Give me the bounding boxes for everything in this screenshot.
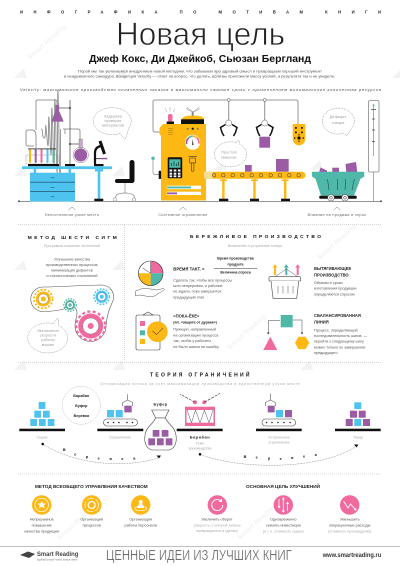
- label: turnover: (скорость, с которой запасы: [194, 523, 241, 527]
- icon: turnover: [208, 495, 227, 515]
- panel: lean production: [136, 234, 367, 355]
- label: reduce expenses: Уменьшить: [340, 518, 360, 522]
- flask: round: [73, 139, 88, 163]
- label: turnover: Увеличить оборот: [201, 518, 233, 522]
- signal lamp: [165, 107, 175, 124]
- heading: total quality management: МЕТОД ВСЕОБЩЕГО УПРАВЛЕНИЯ КАЧЕСТВОМ: [35, 484, 148, 489]
- takt time text: [173, 278, 232, 299]
- label: reduce expenses: (стоимость производства): [328, 529, 371, 533]
- heading: main goal: ОСНОВНАЯ ЦЕЛЬ УЛУЧШЕНИЙ: [246, 484, 320, 489]
- intro text: Порой мы так увлекаемся внедрением новой методики, что забываем про здравый смысл и превращаем хороший инструмент: [78, 70, 322, 74]
- text: Smart Reading: [237, 503, 278, 541]
- poka-yoke text: Принцип, направленный: [173, 328, 216, 332]
- bubble: shortage: товара: [332, 121, 345, 125]
- stage: buffer: Буфер: [154, 403, 168, 407]
- panel: main improvement goal: [194, 484, 371, 533]
- label: staff organization: Организация: [129, 518, 152, 522]
- legend circle: Веревка: [73, 414, 90, 418]
- legend circle: Буфер: [75, 404, 88, 408]
- six sigma description: и статистических отклонений: [47, 274, 97, 278]
- chair: [113, 160, 136, 201]
- pull production text: изготовления продукции: [314, 287, 356, 291]
- stage: product: [335, 402, 381, 440]
- six sigma description: [46, 258, 98, 278]
- overhead pipe: [153, 100, 298, 132]
- label: variable bottleneck: Непостоянное узкое место: [45, 213, 99, 217]
- six sigma description: Улучшение качества: [54, 258, 91, 262]
- stage: removed constraint: ограничение: [268, 441, 290, 445]
- pull production text: Объемы и сроки: [314, 281, 343, 285]
- balanced line text: перейти к следующему шагу: [314, 340, 364, 344]
- bubble: machine speed: скорости: [40, 334, 56, 338]
- stage: product: Товар: [353, 436, 363, 440]
- bubble: machine idle: [215, 140, 247, 167]
- takt time formula: продукта: [228, 262, 244, 266]
- subheading: lean: Выявление и устранение потерь: [228, 244, 282, 248]
- cart: [312, 172, 364, 201]
- gears with belt: [31, 285, 114, 342]
- bubble: machine speed: Увеличение: [37, 329, 59, 333]
- poka-yoke text: «ПОКА-ЁКЕ»: [173, 313, 200, 318]
- icon: continuous improvement: [32, 495, 51, 515]
- balanced line text: предыдущего: [314, 351, 338, 355]
- vent: [168, 128, 173, 135]
- arrow: rope 1: е: [74, 452, 76, 456]
- stage: removed constraint: Устраненное: [268, 436, 290, 440]
- stage: raw materials: [19, 402, 65, 440]
- arrow: rope 2: р: [268, 456, 271, 460]
- bubble: machine speed: машин: [42, 343, 54, 347]
- label: reduce investment: снизить инвестиции: [266, 523, 301, 527]
- pull production text: [314, 266, 356, 296]
- title: Новая цель: [116, 16, 285, 52]
- takt time text: предыдущий этап: [173, 295, 204, 299]
- text: Smart Reading: [227, 313, 268, 351]
- arrow: rope 1: е: [98, 456, 100, 460]
- footer slogan: ЦЕННЫЕ ИДЕИ ИЗ ЛУЧШИХ КНИГ: [106, 548, 292, 564]
- stage: drum: Темп: [196, 442, 204, 446]
- poka-yoke text: [173, 313, 219, 349]
- arrow: rope 1: р: [86, 455, 89, 459]
- gauge: [185, 135, 200, 150]
- authors: Джеф Кокс, Ди Джейкоб, Сьюзан Бергланд: [89, 53, 311, 65]
- panel: theory of constraints: [19, 371, 381, 465]
- text: Smart Reading: [127, 23, 168, 61]
- footer url: www.smartreading.ru: [322, 553, 382, 559]
- takt time formula: Время производства: [217, 257, 254, 261]
- heading: theory of constraints: ТЕОРИЯ ОГРАНИЧЕНИЙ: [150, 371, 250, 379]
- label: turnover: превращаются в сделки): [196, 529, 238, 533]
- bubble: machine idle: машины: [221, 156, 237, 160]
- arrow: rope 2: е: [256, 456, 258, 460]
- footer: [20, 548, 382, 564]
- label: process organization: процессов: [83, 523, 101, 527]
- icon: hand: [136, 288, 164, 297]
- label: turnover: [194, 518, 241, 533]
- floor line: [18, 200, 382, 202]
- bubble: delay: материалов: [102, 124, 124, 128]
- balanced line text: [314, 313, 367, 355]
- six sigma description: минимизация дефектов: [51, 268, 93, 272]
- arrow: rope 2: е: [280, 457, 282, 461]
- footer brand: Удобный способ читать лучшие книги: [37, 558, 78, 561]
- label: sales and demand: Влияние на продажи и спрос: [308, 213, 366, 217]
- heading: lean: БЕРЕЖЛИВОЕ ПРОИЗВОДСТВО: [190, 234, 321, 240]
- gear: teal: [64, 299, 76, 311]
- takt time formula: Величина спроса: [220, 271, 251, 275]
- conveyor: [204, 172, 306, 201]
- arrow: rope 1: а: [133, 456, 136, 460]
- test tube rack: [26, 148, 59, 166]
- bubble: shortage: [322, 108, 354, 136]
- arrow: rope 2: а: [315, 453, 318, 457]
- arrow: rope 1: В: [63, 448, 66, 452]
- text: Smart Reading: [27, 23, 68, 61]
- label: process organization: Организация: [80, 518, 103, 522]
- label: continuous improvement: повышение: [32, 523, 52, 527]
- balanced line text: можно только по завершении: [314, 345, 365, 349]
- legend circle: Барабан: [73, 394, 90, 398]
- subheading: theory of constraints: Оптимизация потока за счет максимизации производства в единственном узком месте: [100, 382, 300, 386]
- arrow: rope 2: В: [244, 455, 247, 459]
- label: sales and demand: [308, 207, 366, 217]
- boxes on conveyor: [245, 159, 289, 172]
- arrow: rope 1: [41, 443, 161, 464]
- machine dome and wing nut: [181, 108, 204, 124]
- arrow: rope 2: к: [303, 454, 305, 458]
- takt time formula: [173, 257, 257, 275]
- dials: [187, 128, 199, 130]
- machine body: [160, 124, 206, 200]
- stage: drum: Барабан: [190, 435, 210, 440]
- arrow: rope 1: к: [121, 457, 123, 461]
- six sigma description: производственных процессов,: [46, 263, 98, 267]
- label: continuous improvement: качества продукции: [24, 529, 59, 533]
- plunger: [188, 156, 197, 172]
- stage: removed constraint: [256, 394, 302, 445]
- bubble: delay: Задержка: [104, 114, 123, 118]
- balanced line text: СБАЛАНСИРОВАННАЯ: [314, 313, 361, 318]
- label: continuous improvement: [24, 518, 59, 533]
- velocity definition: Velocity: максимальное производство оплаченных заказов в максимально сжатые сроки с привлечением минимального количества ресурсов: [20, 87, 381, 92]
- bubble: machine speed: работы: [41, 338, 55, 342]
- intro text: [64, 70, 335, 78]
- label: continuous improvement: Непрерывное: [30, 518, 54, 522]
- takt time text: не ждали, пока завершится: [173, 290, 221, 294]
- icon: staff organization: [131, 495, 150, 515]
- yellow pendant controller: [293, 124, 305, 145]
- pull production text: ПРОИЗВОДСТВО: [314, 272, 349, 278]
- icon: process organization: [82, 495, 101, 515]
- legend circle: [62, 386, 100, 424]
- lab table: [22, 166, 112, 202]
- footer brand: [37, 551, 78, 561]
- lever: [151, 157, 161, 179]
- label: system constraint: Системное ограничение: [158, 213, 208, 217]
- arrow: rope 1: в: [110, 457, 113, 461]
- stage: constraint: [97, 394, 143, 440]
- poka-yoke text: (яп. «защита от дурака»): [173, 320, 218, 324]
- icon: pie clock: [138, 261, 163, 286]
- takt time text: шли непрерывно, и рабочие: [173, 284, 223, 288]
- heading: six sigma: МЕТОД ШЕСТИ СИГМ: [28, 235, 117, 241]
- pull production text: ВЫТЯГИВАЮЩЕЕ: [314, 266, 351, 271]
- balanced line text: Процесс, определяющий: [314, 328, 358, 332]
- gear: yellow: [34, 290, 53, 308]
- footer brand: Smart Reading: [37, 551, 78, 558]
- pull production text: определяются спросом: [314, 292, 355, 296]
- progress bars: [167, 186, 201, 195]
- microscope: [94, 141, 108, 166]
- label: variable bottleneck: [45, 207, 99, 217]
- thermometer gauge: [368, 100, 379, 201]
- text: Smart Reading: [222, 23, 263, 61]
- bubble: shortage: Дефицит: [330, 115, 346, 119]
- label: process organization: [80, 518, 103, 527]
- arrow: rope 2: [199, 444, 358, 465]
- stage: drum: производства: [189, 446, 211, 450]
- poka-yoke text: так, чтобы у рабочего: [173, 339, 211, 343]
- bubble: delay: проверки: [104, 119, 122, 123]
- balanced line text: последовательность шагов, —: [314, 334, 367, 338]
- takt time text: Сделать так, чтобы все процессы: [173, 278, 232, 282]
- label: staff organization: [124, 518, 158, 527]
- stage: drum: [177, 393, 223, 450]
- label: system constraint: [158, 207, 208, 217]
- stage: buffer: [145, 403, 176, 450]
- footer logo icon: [20, 552, 35, 558]
- intro text: в неадекватного самодура. Концепция Velocity — ответ на вопрос, что делать, если вы приложили массу усилий, а результата так и не увидели.: [64, 74, 335, 78]
- label: reduce investment: [263, 518, 304, 533]
- cart boxes: [319, 162, 357, 172]
- label: reduce expenses: [328, 518, 371, 533]
- icon: clipboard: [136, 312, 168, 350]
- lab stand: [58, 100, 81, 166]
- lab glass tubing: [26, 90, 80, 182]
- icon: basket with arrows: [269, 264, 301, 298]
- label: reduce investment: Одновременно: [270, 518, 296, 522]
- header tagline: ИНФОГРАФИКА ПО МОТИВАМ КНИГИ: [20, 10, 381, 14]
- bubble: delay: [93, 108, 131, 139]
- claw 2 with box: [256, 98, 273, 148]
- text: Smart Reading: [57, 503, 98, 541]
- flask: erlenmeyer: [52, 105, 64, 122]
- label: reduce investment: (в т. ч. стоимость сырья): [263, 529, 304, 533]
- factory illustration: [18, 90, 382, 202]
- panel: total quality management: [24, 484, 158, 533]
- bubble: machine speed: [28, 318, 68, 353]
- balanced line text: ЛИНИЯ: [314, 320, 329, 324]
- control panel: [168, 157, 182, 178]
- text: Smart Reading: [317, 223, 358, 261]
- subheading: six sigma: Программа снижения отклонений: [44, 244, 100, 248]
- poka-yoke text: на организацию процесса: [173, 333, 219, 337]
- panel: six sigma: [28, 235, 117, 353]
- stage: raw materials: Сырьё: [36, 436, 48, 440]
- bubble: machine idle: Простой: [221, 150, 237, 154]
- arrow: rope 2: в: [291, 456, 294, 460]
- label: staff organization: работы персонала: [124, 523, 158, 527]
- gear: blue: [94, 289, 109, 304]
- takt time formula: ВРЕМЯ ТАКТ. =: [173, 266, 205, 272]
- stage: constraint: Ограничение: [109, 436, 131, 440]
- poka-yoke text: не было шанса на ошибку: [173, 345, 219, 349]
- gear: pink: [76, 312, 105, 340]
- label: reduce expenses: операционные расходы: [329, 523, 371, 527]
- icon: balanced line diagram: [263, 315, 309, 350]
- claw 1: [220, 98, 237, 136]
- icon: reduce investment: [274, 495, 293, 515]
- icon: reduce expenses: [340, 495, 359, 515]
